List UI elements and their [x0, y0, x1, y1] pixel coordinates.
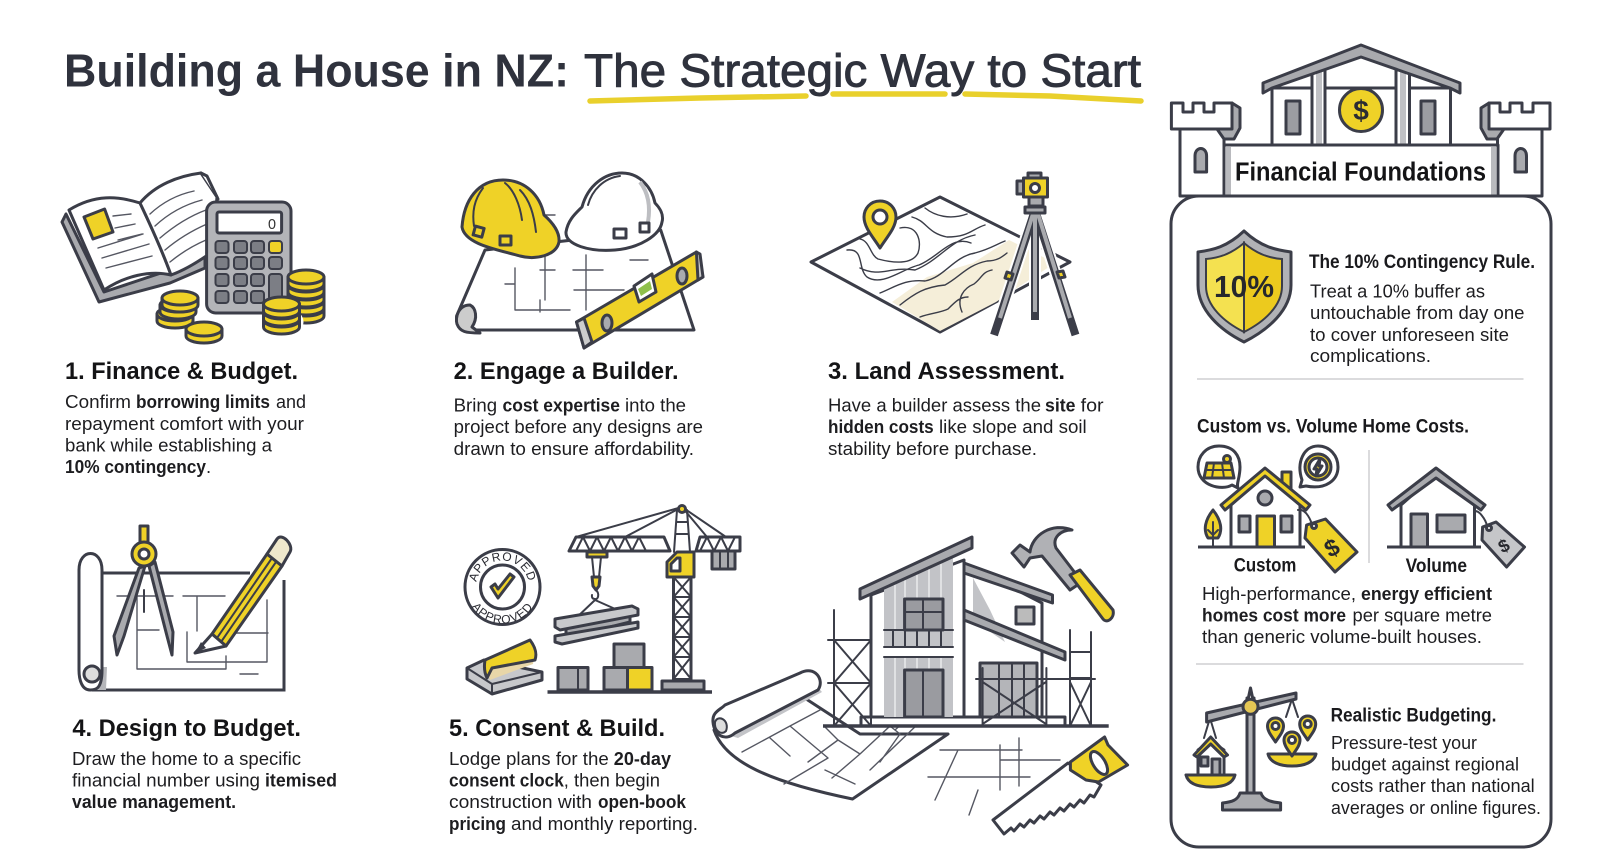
- text: contingency rule: untouchable from day one: [1310, 302, 1524, 323]
- text: contingency rule: complications.: [1310, 345, 1431, 366]
- icon: volume house: [1387, 468, 1524, 567]
- icon: custom house with solar and energy badges: $: [1320, 533, 1345, 563]
- house: [860, 537, 1065, 726]
- text: step 4: [72, 748, 337, 812]
- illustration: house under construction with plans and tools: [713, 528, 1128, 834]
- text: contingency rule: The 10% Contingency Rule.: [1309, 252, 1535, 273]
- panel border: [1171, 196, 1551, 847]
- text: contingency rule: to cover unforeseen site: [1310, 324, 1509, 345]
- icon: approved stamp: [464, 548, 542, 626]
- text: step 5: consent clock: [449, 770, 564, 791]
- plans: [713, 671, 1060, 815]
- text: step 5: pricing: [449, 813, 506, 834]
- text: step 5: construction with: [449, 791, 592, 812]
- text: home cost comparison: energy efficient: [1361, 583, 1492, 604]
- icon: castle bank: $: [1353, 95, 1369, 126]
- text: contingency rule: Treat a 10% buffer as: [1310, 280, 1485, 301]
- title: The Strategic Way to Start: [584, 44, 1141, 96]
- text: step 2: cost expertise: [502, 395, 620, 416]
- icon: plans, compass and pencil: [79, 526, 291, 690]
- icon: balance scale: [1186, 688, 1316, 810]
- text: step 3: [828, 395, 1104, 459]
- text: step 2: Bring: [454, 395, 497, 416]
- text: step 3: hidden costs: [828, 416, 934, 437]
- heading: step 4: 4. Design to Budget.: [72, 715, 301, 742]
- text: step 5: 20-day: [614, 748, 672, 769]
- heading: step 3: 3. Land Assessment.: [828, 358, 1065, 385]
- icon: approved stamp: APPROVED: [470, 552, 535, 582]
- heading: financial foundations: Financial Foundations: [1235, 159, 1486, 187]
- text: realistic budgeting: Realistic Budgeting.: [1331, 706, 1496, 727]
- text: step 4: itemised: [265, 770, 337, 791]
- icon: contour map, pin and survey tripod: [811, 173, 1076, 335]
- text: step 3: for: [1081, 395, 1104, 416]
- text: step 4: financial number using: [72, 770, 260, 791]
- icon: crane, beam and materials: [467, 506, 740, 694]
- text: step 1: repayment comfort with your: [65, 413, 304, 434]
- icon: hard hats, plans and spirit level: [456, 173, 703, 348]
- text: realistic budgeting: Pressure-test your: [1331, 732, 1477, 753]
- text: home cost comparison: homes cost more: [1202, 605, 1346, 626]
- text: step 3: Have a builder assess the: [828, 395, 1041, 416]
- text: home cost comparison: than generic volume-built houses.: [1202, 626, 1482, 647]
- scaffolding: [823, 610, 1109, 726]
- text: step 3: like slope and soil: [939, 416, 1087, 437]
- text: step 3: site: [1045, 395, 1076, 416]
- panel: financial foundations: [1171, 45, 1551, 847]
- text: realistic budgeting: costs rather than national: [1331, 775, 1535, 796]
- icon: approved stamp: APPROVED: [472, 604, 532, 624]
- heading: step 5: 5. Consent & Build.: [449, 715, 665, 742]
- text: step 2: drawn to ensure affordability.: [454, 438, 694, 459]
- icon: custom house with solar and energy badges: [1198, 446, 1357, 572]
- label: custom: Custom: [1234, 556, 1296, 577]
- text: home cost comparison: per square metre: [1352, 605, 1492, 626]
- text: step 4: Draw the home to a specific: [72, 748, 301, 769]
- text: step 4: value management.: [72, 791, 236, 812]
- icon: castle bank: [1171, 45, 1550, 196]
- icon: book, calculator and coins: [62, 173, 324, 343]
- text: step 5: , then begin: [564, 770, 660, 791]
- text: realistic budgeting: averages or online figures.: [1331, 797, 1541, 818]
- text: step 3: stability before purchase.: [828, 438, 1037, 459]
- text: contingency rule: [1309, 252, 1535, 366]
- text: step 1: 10% contingency: [65, 456, 207, 477]
- title: Building a House in NZ:: [64, 44, 569, 96]
- icon: hammer: [1012, 528, 1113, 621]
- title: [64, 44, 1141, 101]
- icon: 10% shield: [1198, 231, 1291, 342]
- text: realistic budgeting: budget against regional: [1331, 754, 1519, 775]
- icon: book, calculator and coins: 0: [268, 216, 276, 233]
- text: step 5: [449, 748, 698, 834]
- text: step 2: [454, 395, 703, 459]
- heading: step 2: 2. Engage a Builder.: [454, 358, 679, 385]
- text: step 1: borrowing limits: [136, 391, 270, 412]
- text: step 1: [65, 391, 306, 477]
- text: home cost comparison: [1202, 583, 1492, 647]
- text: step 1: and: [276, 391, 306, 412]
- text: step 1: bank while establishing a: [65, 435, 273, 456]
- icon: saw: [993, 737, 1128, 834]
- heading: custom vs volume: Custom vs. Volume Home Costs.: [1197, 416, 1469, 438]
- text: home cost comparison: High-performance,: [1202, 583, 1356, 604]
- heading: step 1: 1. Finance & Budget.: [65, 358, 298, 385]
- label: volume: Volume: [1406, 556, 1467, 577]
- text: realistic budgeting: [1331, 706, 1541, 818]
- icon: volume house: $: [1495, 535, 1513, 557]
- text: step 1: Confirm: [65, 391, 131, 412]
- text: step 5: and monthly reporting.: [511, 813, 698, 834]
- text: step 1: .: [206, 456, 211, 477]
- text: step 5: open-book: [598, 791, 687, 812]
- text: step 5: Lodge plans for the: [449, 748, 609, 769]
- text: step 2: project before any designs are: [454, 416, 703, 437]
- icon: 10% shield: 10%: [1214, 269, 1274, 304]
- text: step 2: into the: [625, 395, 686, 416]
